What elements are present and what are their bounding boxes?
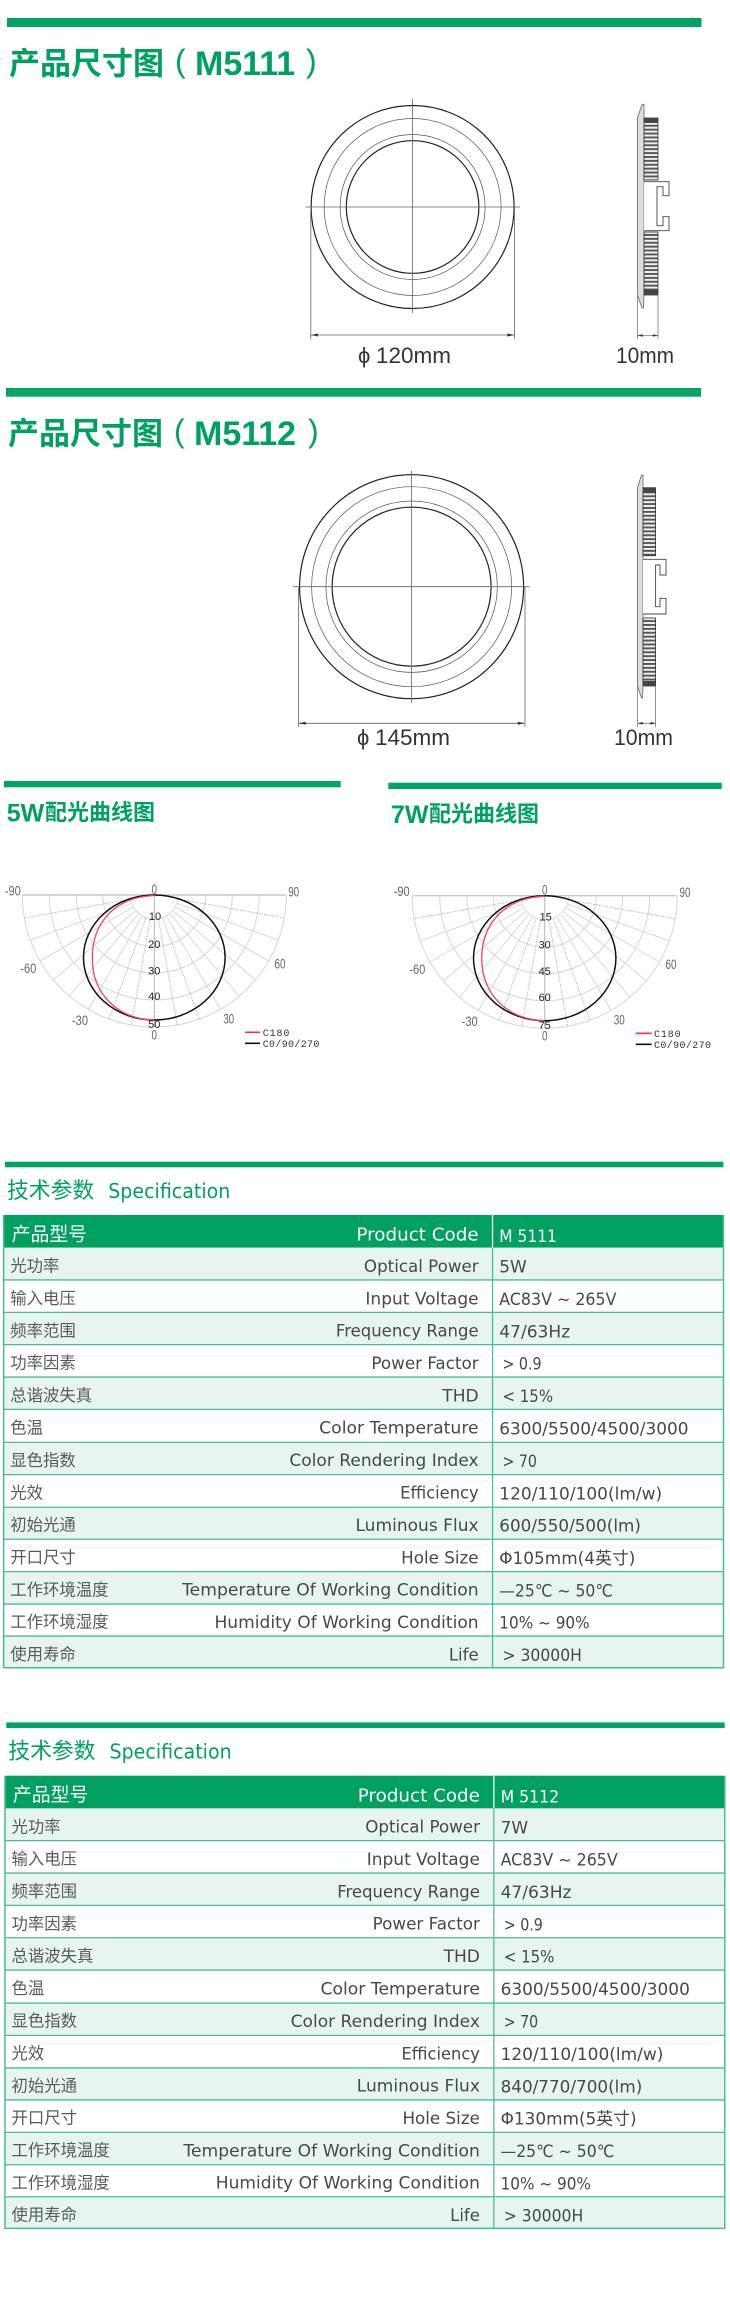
row: Humidity Of Working Condition: 工作环境湿度 [12,2173,110,2192]
section: specification M5111 [4,1162,723,1668]
row: Color Rendering Index [5,2003,725,2035]
table header row [4,1215,723,1248]
section: 7W light distribution [388,783,722,1052]
row: Humidity Of Working Condition: 工作环境湿度 [10,1613,109,1632]
table: M5111 specification [4,1215,723,1668]
row: Frequency Range: 47/63Hz [499,1321,570,1341]
row: THD: 总谐波失真 [10,1387,92,1405]
row: Humidity Of Working Condition: Humidity Of Working Condition [214,1613,479,1632]
dimension label: 145mm: ϕ [357,725,369,750]
row: Color Temperature [12,1979,690,1999]
polar chart: 5W: -30 [72,1013,88,1028]
row: Efficiency: 120/110/100(lm/w) [501,2044,663,2064]
row: Color Temperature: 色温 [10,1419,43,1437]
title: specification 1: Specification [108,1180,230,1203]
polar chart: 5W: 50 [148,1019,160,1031]
row: Life: 使用寿命 [10,1646,76,1664]
row: Input Voltage [12,1850,618,1870]
row: Frequency Range: 频率范围 [10,1322,76,1340]
row: THD: < 15% [502,1386,553,1406]
row: Hole Size: Hole Size [402,2109,480,2128]
heading bar 5W [4,781,341,787]
row: Frequency Range: Frequency Range [336,1322,479,1341]
row: THD: 总谐波失真 [12,1948,93,1966]
table: M5112 specification [5,1776,725,2228]
polar chart: 5W: 30 [223,1012,234,1026]
row: Luminous Flux: 初始光通 [10,1517,76,1535]
row: Temperature Of Working Condition [5,2132,725,2165]
row: Color Rendering Index: > 70 [502,1451,537,1471]
row: Efficiency: 光效 [10,1484,43,1502]
polar chart: 7W: 15 [540,912,552,924]
polar chart: 5W: 90 [288,884,299,900]
table header row: M 5112 [501,1787,559,1807]
title: M5111: ) [306,43,317,79]
row: Efficiency: 120/110/100(lm/w) [499,1483,662,1503]
title: specification 1: 技术参数 [7,1178,94,1203]
row: Efficiency: 光效 [12,2045,44,2063]
polar chart: 7W: 90 [680,885,690,900]
row: Input Voltage: 输入电压 [10,1290,76,1308]
row: Life: > 30000H [502,1645,582,1665]
table header row: Product Code [356,1226,479,1246]
row: Color Rendering Index [4,1442,723,1475]
row: Life [5,2197,725,2228]
row: Color Rendering Index: Color Rendering Index [289,1451,479,1470]
row: Temperature Of Working Condition: Temperature Of Working Condition [181,1581,479,1600]
row: Optical Power: 7W [501,1817,528,1837]
row: Color Rendering Index: > 70 [504,2012,538,2032]
row: Power Factor: > 0.9 [504,1914,543,1934]
polar chart: 7W: 60 [539,992,551,1004]
title: M5111: 产品尺寸图 [9,46,164,82]
diagram: side view M5112 [638,475,666,727]
polar chart: 5W: 0 [152,1028,157,1042]
row: Optical Power [5,1808,725,1841]
row: Hole Size: Φ105mm(4英寸) [499,1548,635,1568]
title: 7W curve: 配光曲线图 [429,802,539,826]
diagram: front view M5111 [306,99,520,339]
row: Life: 使用寿命 [12,2207,77,2225]
row: Power Factor [12,1914,543,1934]
polar chart: 5W: 40 [148,991,160,1003]
table header row: 产品型号 [12,1223,87,1246]
polar chart: 5W [5,882,319,1051]
row: Color Temperature [10,1418,689,1438]
row: Frequency Range: 频率范围 [12,1883,77,1901]
title: M5112: M5112 [194,415,296,453]
title: 5W curve: 配光曲线图 [45,800,155,825]
polar chart: 5W: 30 [148,965,160,977]
dimension label: 145mm: 145mm [375,725,450,750]
row: Temperature Of Working Condition: Temperature Of Working Condition [182,2141,480,2160]
row: Luminous Flux: Luminous Flux [357,2077,480,2096]
row: Color Rendering Index: Color Rendering Index [291,2012,480,2031]
row: Luminous Flux: 840/770/700(lm) [501,2076,642,2096]
section: M5111 dimensions [7,18,702,368]
row: Frequency Range: 47/63Hz [501,1882,572,1902]
row: THD: THD [441,1386,479,1405]
heading bar 7W [388,783,722,789]
polar chart: 5W: C180 [263,1029,289,1040]
dimension label: 120mm: 120mm [376,343,451,368]
row: Color Temperature: Color Temperature [319,1419,479,1438]
polar chart: 5W: 60 [274,956,286,972]
row: Input Voltage: AC83V ~ 265V [499,1289,617,1309]
row: Optical Power: Optical Power [365,1818,480,1837]
row: Optical Power: 5W [499,1257,527,1277]
polar chart: 7W: 30 [539,940,551,952]
title: specification 2: 技术参数 [8,1739,96,1764]
table header row [5,1776,725,1808]
row: Optical Power: Optical Power [364,1257,479,1276]
row: Humidity Of Working Condition: 10% ~ 90% [499,1613,590,1633]
row: Luminous Flux [5,2068,725,2100]
row: Humidity Of Working Condition: 10% ~ 90% [501,2173,591,2193]
row: Optical Power: 光功率 [10,1258,59,1276]
row: Hole Size: Hole Size [401,1548,479,1567]
row: Input Voltage: Input Voltage [367,1850,480,1869]
row: Luminous Flux: 初始光通 [12,2077,77,2095]
row: Color Temperature: 6300/5500/4500/3000 [499,1418,689,1438]
dimension label: 120mm: ϕ [358,343,370,368]
polar chart: 5W: -60 [20,961,36,976]
row: Optical Power: 光功率 [12,1818,61,1836]
row: Luminous Flux: Luminous Flux [355,1516,479,1535]
heading bar M5112 [6,388,701,397]
row: Power Factor: > 0.9 [502,1354,542,1374]
polar chart: 5W: -90 [5,884,21,898]
table header row: M 5111 [499,1226,557,1246]
polar chart: 7W: -30 [462,1014,478,1029]
polar chart: 7W [394,882,711,1052]
row: Input Voltage: Input Voltage [365,1289,479,1308]
section: specification M5112 [5,1722,725,2228]
section: M5112 dimensions [6,388,701,750]
row: Humidity Of Working Condition [10,1613,590,1633]
title: M5112: ( [174,413,185,449]
title: M5111: M5111 [195,45,295,83]
row: Life: > 30000H [504,2206,583,2226]
row: Input Voltage [10,1289,617,1309]
diagram: front view M5112 [293,471,530,727]
title: 5W curve: 5W [7,800,45,828]
polar chart: 7W: 45 [539,966,551,978]
row: Power Factor: Power Factor [373,1915,480,1934]
row: Hole Size: 开口尺寸 [12,2110,77,2128]
row: Frequency Range: Frequency Range [337,1882,480,1901]
row: Hole Size: Φ130mm(5英寸) [501,2109,637,2129]
dimension label: 10mm: 10mm [616,343,674,368]
heading bar specification 1 [5,1162,723,1167]
polar chart: 7W: 0 [542,882,547,898]
row: Color Temperature: 色温 [12,1980,44,1998]
table header row: 产品型号 [13,1784,88,1806]
row: Life: Life [449,1645,479,1664]
row: Input Voltage: 输入电压 [12,1851,77,1869]
row: Efficiency [12,2044,663,2064]
row: Hole Size: 开口尺寸 [10,1549,76,1567]
title: 7W curve: 7W [391,801,429,829]
row: Color Rendering Index: 显色指数 [10,1452,76,1470]
row: Efficiency [10,1483,662,1503]
row: Optical Power [4,1248,723,1280]
row: Temperature Of Working Condition: 工作环境温度 [10,1580,109,1599]
diagram: side view M5111 [638,104,669,339]
heading bar M5111 [7,18,702,27]
polar chart: 5W: C0/90/270 [263,1039,319,1051]
row: Luminous Flux: 600/550/500(lm) [499,1516,641,1536]
row: Color Temperature: Color Temperature [320,1979,480,1998]
row: Humidity Of Working Condition: Humidity Of Working Condition [216,2174,480,2193]
polar chart: 7W: -60 [409,962,425,977]
row: Power Factor: Power Factor [371,1354,479,1373]
polar chart: 7W: 30 [614,1012,625,1028]
heading bar specification 2 [6,1722,725,1728]
polar chart: 7W: C180 [654,1030,681,1041]
row: Color Temperature: 6300/5500/4500/3000 [501,1979,690,1999]
row: Frequency Range [5,1873,725,1905]
row: Power Factor: 功率因素 [10,1355,76,1373]
row: THD [5,1938,725,1970]
row: Efficiency: Efficiency [401,2044,480,2063]
row: Frequency Range [4,1312,723,1345]
row: Power Factor [10,1354,542,1374]
row: Life: Life [450,2206,480,2225]
title: M5111: ( [175,43,186,79]
polar chart: 7W: 75 [539,1020,551,1032]
row: Temperature Of Working Condition: —25℃ ~ 50℃ [499,1580,613,1600]
row: Hole Size [10,1548,635,1568]
polar chart: 7W: 60 [666,957,676,972]
row: Temperature Of Working Condition [4,1572,723,1604]
table header row: Product Code [358,1786,480,1806]
row: Power Factor: 功率因素 [12,1915,77,1933]
row: THD: THD [443,1947,480,1966]
row: Input Voltage: AC83V ~ 265V [501,1850,618,1870]
row: Efficiency: Efficiency [400,1484,479,1503]
row: Temperature Of Working Condition: 工作环境温度 [12,2141,110,2160]
polar chart: 7W: -90 [394,884,410,899]
row: Temperature Of Working Condition: —25℃ ~ 50℃ [501,2141,614,2161]
section: 5W light distribution [4,781,341,1051]
title: M5112: ) [308,413,319,449]
polar chart: 5W: 0 [152,882,157,897]
polar chart: 5W: 10 [149,911,161,923]
row: THD: < 15% [504,1947,554,1967]
polar chart: 5W: 20 [148,939,160,951]
polar chart: 7W: 0 [542,1028,547,1044]
polar chart: 7W: C0/90/270 [654,1040,711,1052]
row: Hole Size [12,2109,637,2129]
row: Life [4,1636,723,1668]
row: Color Rendering Index: 显色指数 [12,2013,77,2031]
row: Luminous Flux [4,1507,723,1539]
dimension label: 10mm: 10mm [614,725,673,750]
row: Humidity Of Working Condition [12,2173,591,2193]
row: THD [4,1377,723,1409]
title: M5112: 产品尺寸图 [8,416,163,452]
title: specification 2: Specification [110,1741,232,1764]
